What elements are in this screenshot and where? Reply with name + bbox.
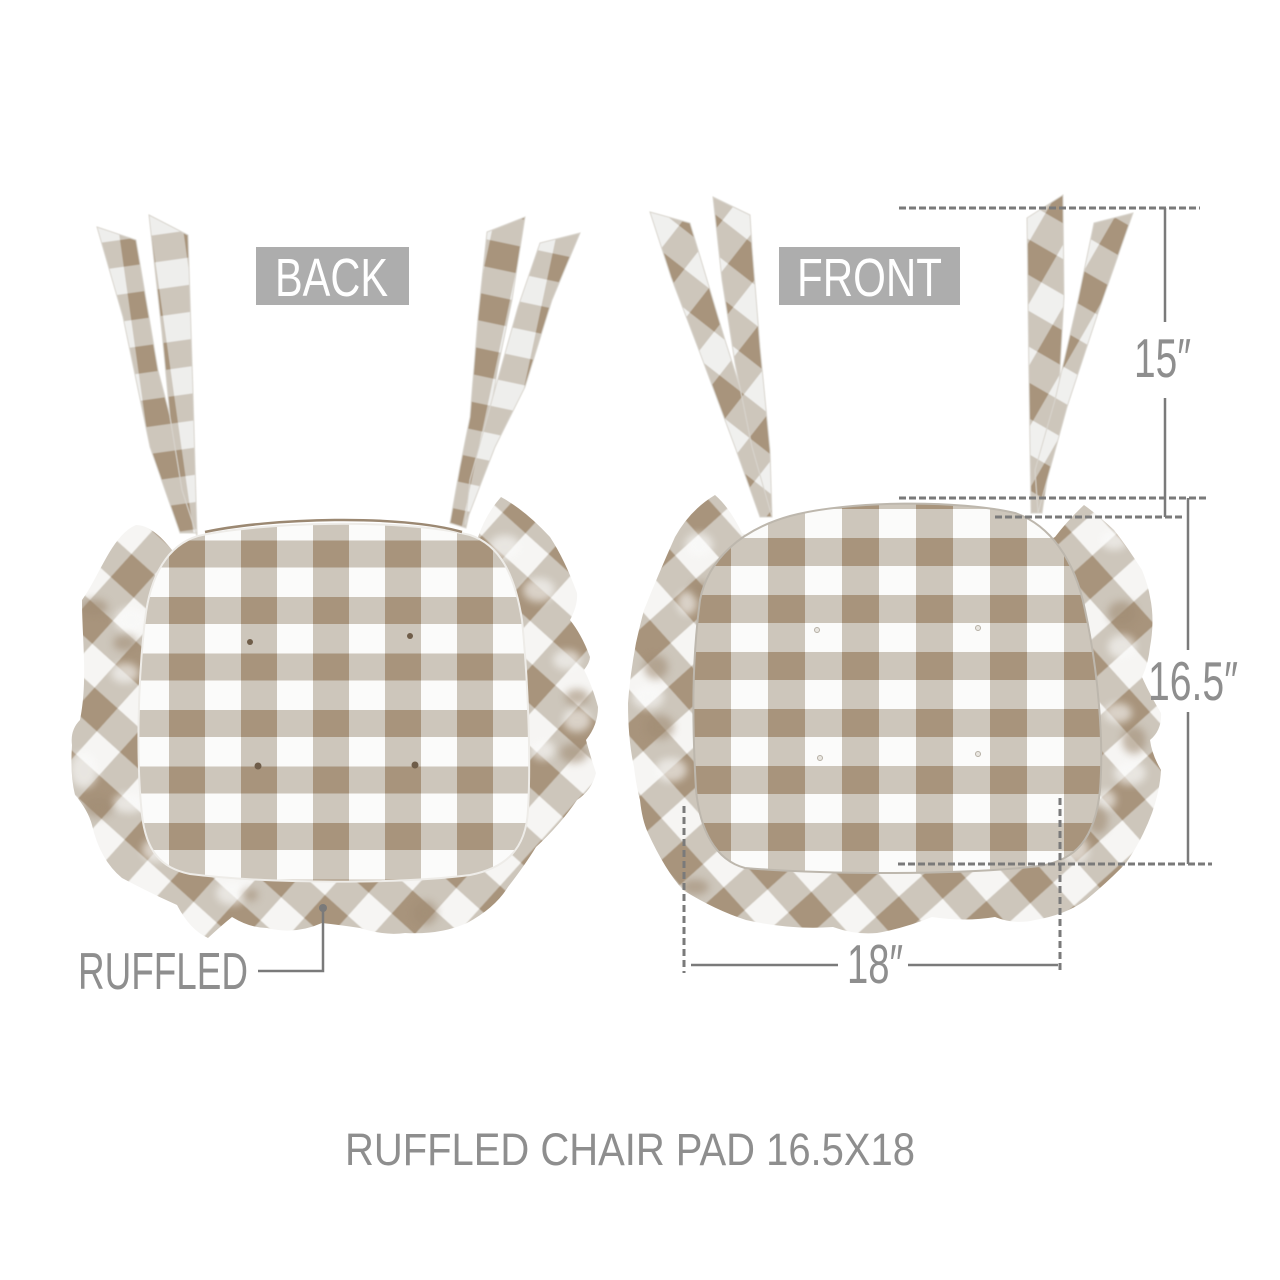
front tie straps xyxy=(650,195,1133,517)
back cushion tufts xyxy=(247,633,418,770)
front ruffle xyxy=(620,490,1170,940)
panel: front view chair pad xyxy=(620,195,1238,995)
back ruffle xyxy=(60,490,610,950)
dimension: tie length 15 inches: 15″ xyxy=(1134,327,1191,389)
dimension: width 18 inches: 18″ xyxy=(847,933,903,995)
dimension: tie length 15 inches xyxy=(899,208,1200,517)
panel: back view chair pad xyxy=(60,215,610,1001)
front label: FRONT xyxy=(797,248,942,308)
dimension: width 18 inches xyxy=(684,798,1060,995)
front cushion xyxy=(693,504,1101,873)
dimension: height 16.5 inches: 16.5″ xyxy=(1148,650,1238,712)
back cushion top seam xyxy=(205,520,462,532)
back tie straps xyxy=(97,215,580,536)
ruffled callout xyxy=(78,904,327,1001)
back label: BACK xyxy=(275,248,388,308)
caption title: RUFFLED CHAIR PAD 16.5X18 xyxy=(345,1124,915,1175)
back cushion xyxy=(138,524,529,882)
ruffled callout: RUFFLED xyxy=(78,943,248,1001)
dimension: height 16.5 inches xyxy=(898,498,1238,864)
front cushion tufts xyxy=(814,626,980,760)
